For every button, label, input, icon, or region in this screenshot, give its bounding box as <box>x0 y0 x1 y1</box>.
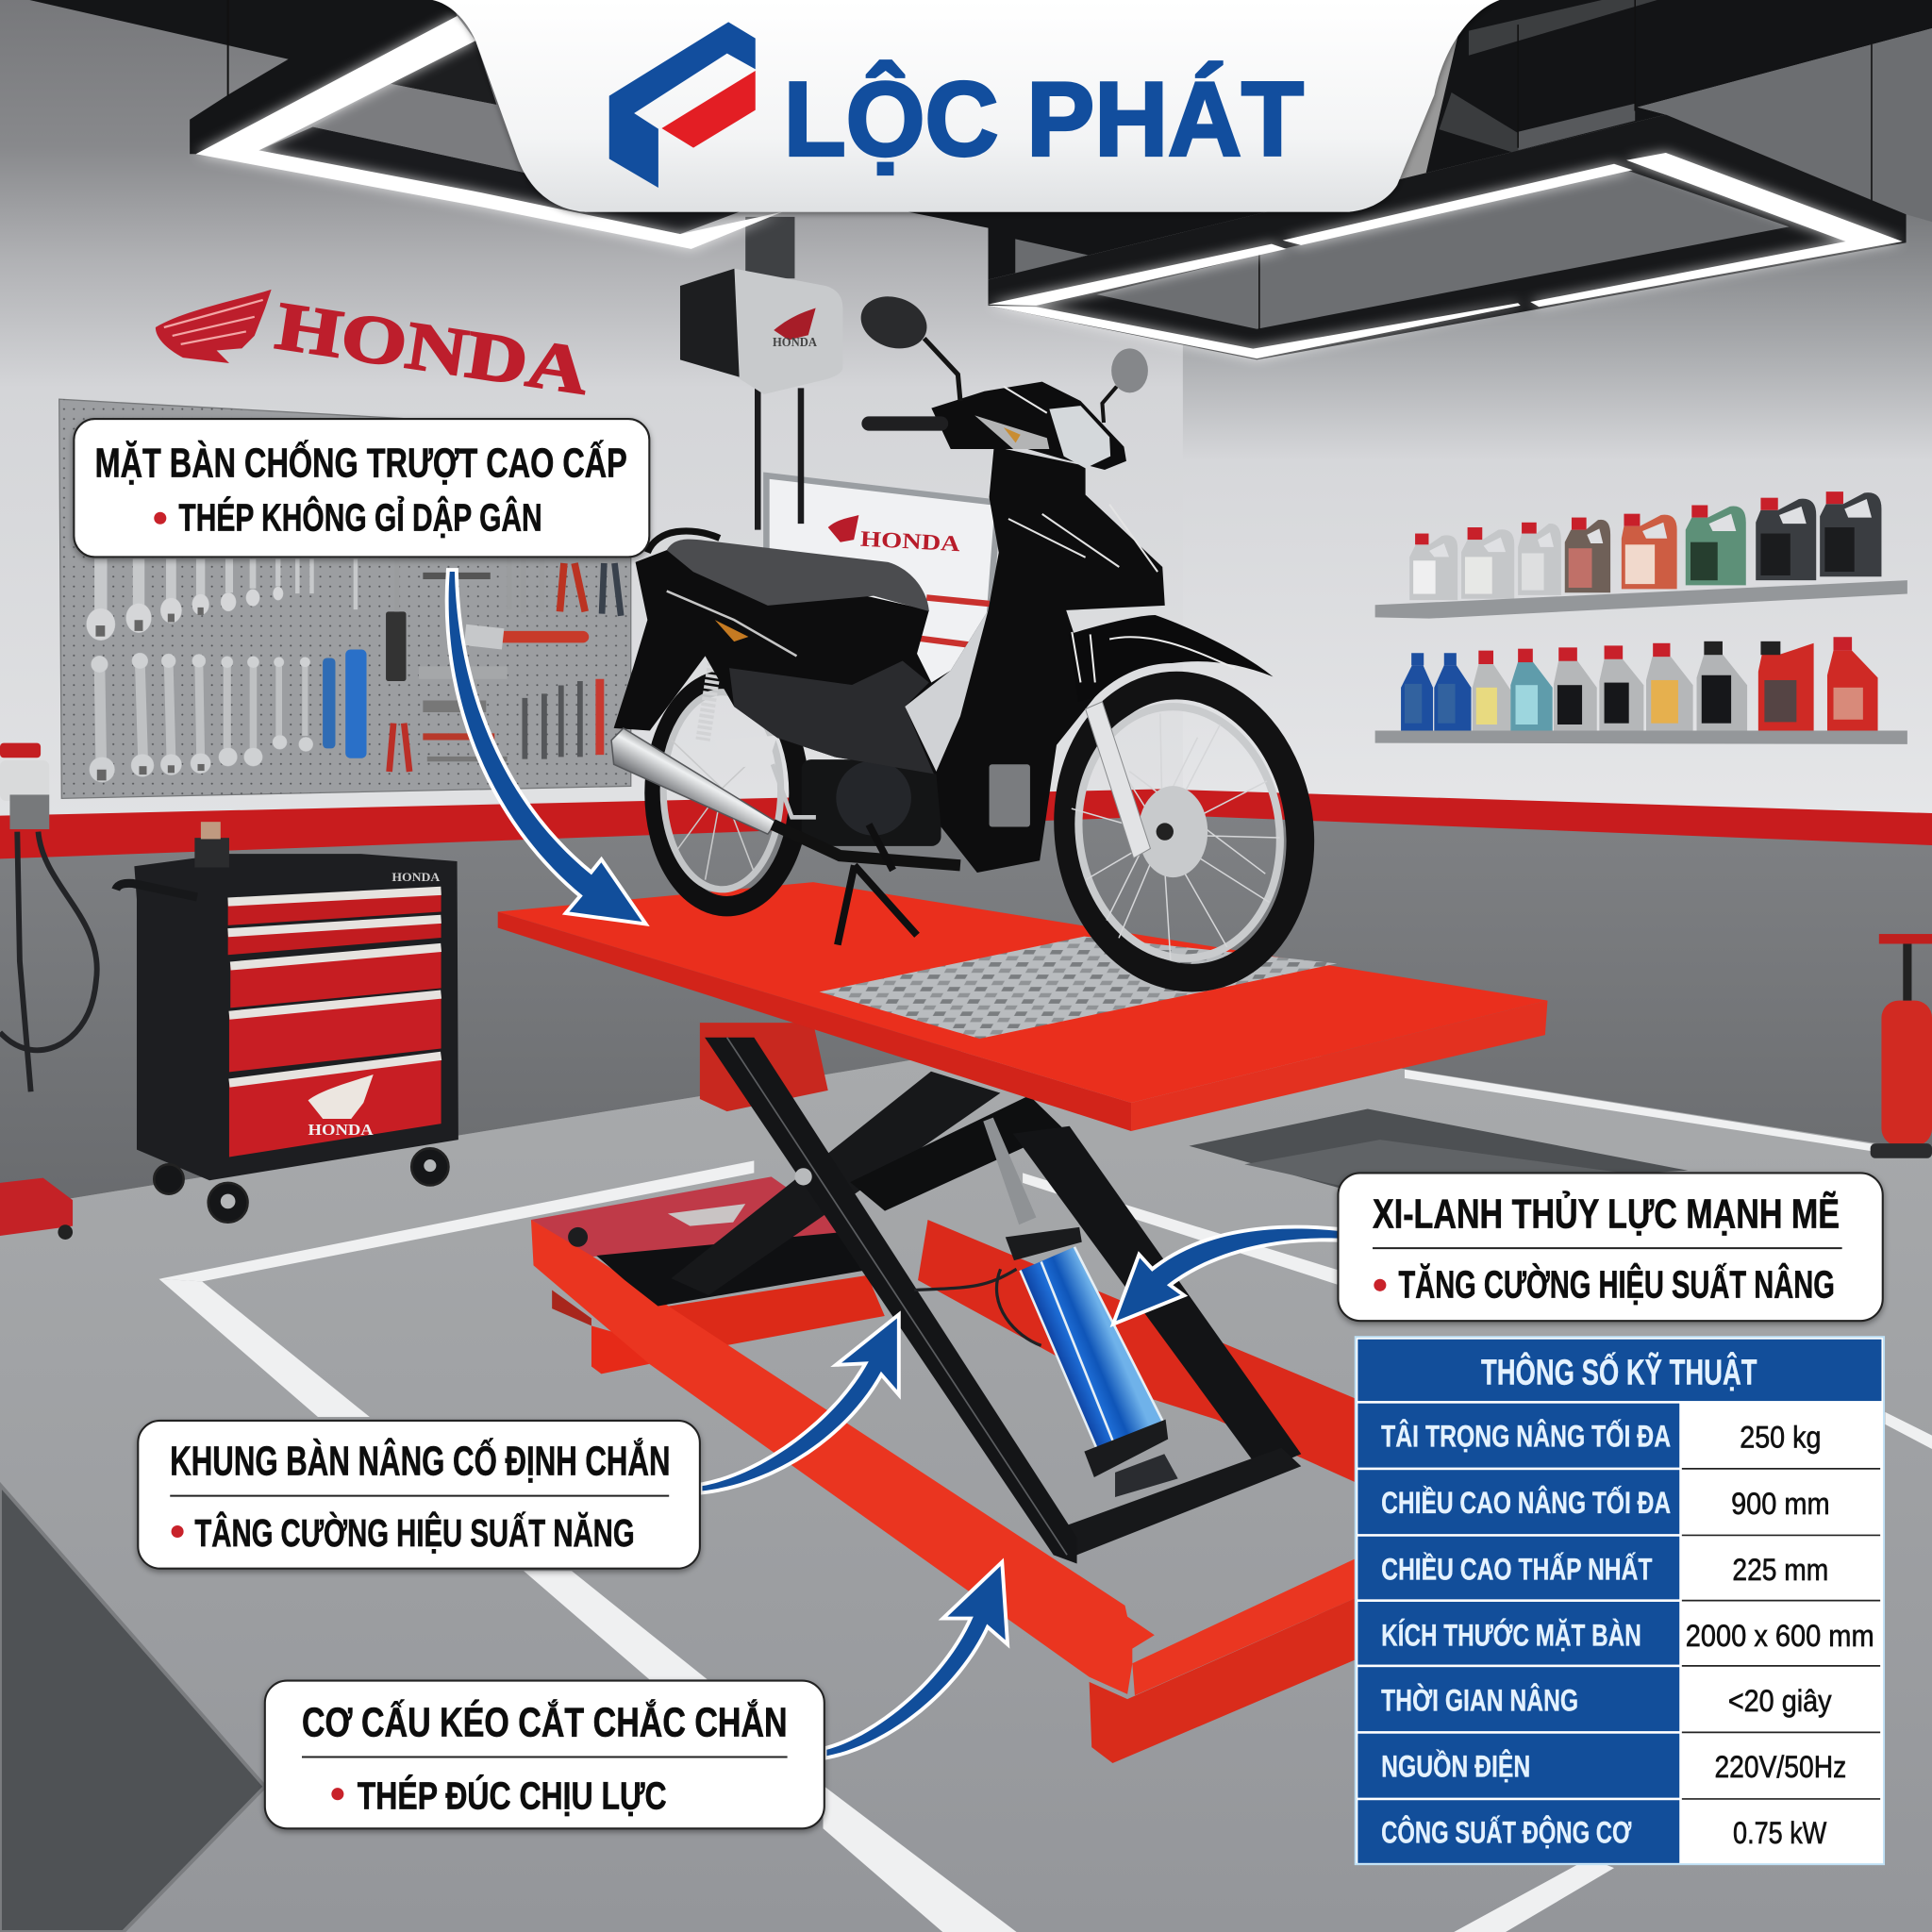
silhouette <box>614 446 1165 873</box>
center stand <box>838 824 917 945</box>
lower cross bar <box>1059 1448 1301 1555</box>
scissor arm back 1 <box>671 1072 1000 1295</box>
callout detail: TÂNG CƯỜNG HIỆU SUẤT NĂNG <box>194 1511 635 1555</box>
floor inlay right <box>1189 1109 1688 1189</box>
left mirror <box>854 289 960 401</box>
hydraulic pump <box>568 1204 865 1306</box>
row: max load: TÂI TRỌNG NÂNG TỐI ĐA <box>1381 1417 1671 1453</box>
cylinder rod <box>983 1118 1036 1224</box>
red wall stripes <box>0 789 1932 858</box>
muffler <box>611 728 776 834</box>
table header <box>1357 1340 1881 1401</box>
red rear post <box>700 1023 828 1111</box>
callout title: CƠ CẤU KÉO CẮT CHẮC CHẮN <box>302 1699 788 1745</box>
lower wall <box>0 808 1932 1210</box>
row: power supply: NGUỒN ĐIỆN <box>1381 1748 1530 1783</box>
row: table size: 2000 x 600 mm <box>1686 1618 1874 1653</box>
callout bullet <box>331 1788 343 1800</box>
row: lift time <box>1381 1683 1832 1718</box>
right wall <box>1183 209 1932 862</box>
scissor arm right <box>1013 1126 1301 1472</box>
callout detail: THÉP ĐÚC CHỊU LỰC <box>358 1774 667 1817</box>
logo plate <box>432 0 1500 212</box>
base plate rear <box>531 1176 850 1257</box>
water heater unit <box>680 269 842 530</box>
callout title: KHUNG BÀN NÂNG CỐ ĐỊNH CHẮN <box>170 1438 671 1484</box>
side handle <box>116 883 197 897</box>
rear wheel <box>655 680 799 907</box>
row: max height: CHIỀU CAO NÂNG TỐI ĐA <box>1381 1484 1671 1520</box>
tool pegboard <box>59 399 631 798</box>
row rules <box>1682 1469 1880 1799</box>
dark ceiling right <box>908 0 1932 279</box>
cabinet Honda text: HONDA <box>308 1121 375 1139</box>
oil bottle shelves <box>1375 491 1907 744</box>
dark bulkhead <box>745 217 794 278</box>
cylinder body <box>1006 1227 1178 1497</box>
lower shelf <box>1375 731 1907 744</box>
engine head metal <box>990 764 1030 827</box>
callout: cylinder <box>1338 1173 1883 1321</box>
ceiling light: right <box>989 114 1907 359</box>
engine <box>802 759 941 846</box>
cowl highlights <box>667 591 796 656</box>
frame rail <box>773 824 960 865</box>
row: power supply: 220V/50Hz <box>1714 1749 1846 1784</box>
motorcycle <box>611 289 1319 993</box>
cabinet Honda wing logo <box>308 1074 374 1119</box>
callout detail: THÉP KHÔNG GỈ DẬP GÂN <box>178 495 542 539</box>
row: table size <box>1381 1617 1874 1653</box>
logo icon <box>609 22 756 188</box>
row: min height: CHIỀU CAO THẤP NHẤT <box>1381 1551 1653 1586</box>
specification table <box>1356 1337 1884 1864</box>
left wall <box>0 0 1185 862</box>
silver panel <box>905 610 989 772</box>
seat <box>667 540 929 611</box>
pivot bolt <box>794 1168 812 1185</box>
row: table size: KÍCH THƯỚC MẶT BÀN <box>1381 1617 1641 1652</box>
table header: THÔNG SỐ KỸ THUẬT <box>1481 1350 1757 1392</box>
rear cross member <box>653 1275 885 1345</box>
row: lift time: <20 giây <box>1728 1683 1832 1718</box>
callout bullet <box>172 1525 184 1538</box>
row: lift time: THỜI GIAN NÂNG <box>1381 1683 1578 1718</box>
floor panel left <box>0 1485 265 1932</box>
row: power supply <box>1381 1748 1846 1784</box>
upper shelf <box>1375 580 1907 619</box>
callout: frame <box>138 1421 700 1569</box>
grab rail <box>647 531 720 553</box>
table top <box>498 882 1547 1131</box>
ceiling light: left <box>29 0 782 249</box>
base foot <box>552 1291 649 1374</box>
row: min height: 225 mm <box>1732 1552 1828 1587</box>
poster Honda logo: HONDA <box>859 527 960 557</box>
shock absorber <box>703 663 715 741</box>
right red tank <box>1871 934 1932 1158</box>
body side <box>729 661 934 774</box>
upper shelf bottles <box>1409 491 1881 600</box>
callout bullet <box>154 512 166 525</box>
arrow: to scissor <box>826 1566 1006 1756</box>
scissor arm back 2 <box>850 1095 1064 1211</box>
wrenches and tools <box>87 559 621 782</box>
arrow: to frame <box>702 1319 897 1491</box>
handlebar <box>869 409 941 438</box>
poster frame <box>766 475 998 740</box>
Honda wordmark: HONDA <box>272 288 593 408</box>
cabinet top block <box>194 822 229 868</box>
floor markings <box>158 1070 1932 1932</box>
front cross beam <box>1090 1558 1356 1763</box>
hydraulic hose <box>914 1269 1041 1345</box>
red tool cabinet <box>116 822 458 1223</box>
poster wing <box>828 515 858 542</box>
arrow: to table top <box>449 572 641 922</box>
cabinet top label: HONDA <box>391 870 441 884</box>
label column <box>1357 1404 1679 1863</box>
right mirror <box>1102 348 1148 423</box>
cabinet wheels <box>154 1148 448 1223</box>
scissor lift <box>531 1038 1356 1763</box>
far base beam <box>918 1220 1356 1482</box>
wall Honda logo <box>156 288 593 408</box>
row: motor power: CÔNG SUẤT ĐỘNG CƠ <box>1381 1813 1631 1849</box>
heater wing <box>774 308 816 340</box>
front disc hub <box>1139 786 1208 877</box>
row: motor power: 0.75 kW <box>1733 1815 1826 1850</box>
callout title: MẶT BÀN CHỐNG TRƯỢT CAO CẤP <box>95 440 627 486</box>
near base beam <box>531 1220 1155 1694</box>
logo text: LỘC PHÁT <box>784 60 1304 178</box>
floor <box>0 1047 1932 1932</box>
row: max height: 900 mm <box>1731 1486 1830 1521</box>
kick lever <box>773 764 816 817</box>
callout: scissor <box>265 1681 824 1828</box>
drawers <box>228 891 441 1157</box>
leg shield highlights <box>1008 505 1158 572</box>
callout: table surface <box>74 419 649 557</box>
anti-slip checker plate <box>820 937 1337 1039</box>
front fender <box>1069 615 1274 702</box>
icon: Honda wing <box>156 290 272 363</box>
front fork <box>1086 702 1150 858</box>
front wheel <box>1049 670 1319 993</box>
row: max load: 250 kg <box>1740 1420 1821 1455</box>
heater label: HONDA <box>773 335 817 349</box>
left wall equipment <box>0 743 97 1240</box>
callout bullet <box>1374 1279 1386 1291</box>
headset <box>931 382 1126 470</box>
arrow: to cylinder <box>1116 1229 1338 1321</box>
scissor arm front <box>705 1038 1077 1563</box>
lower shelf bottles <box>1401 637 1878 731</box>
